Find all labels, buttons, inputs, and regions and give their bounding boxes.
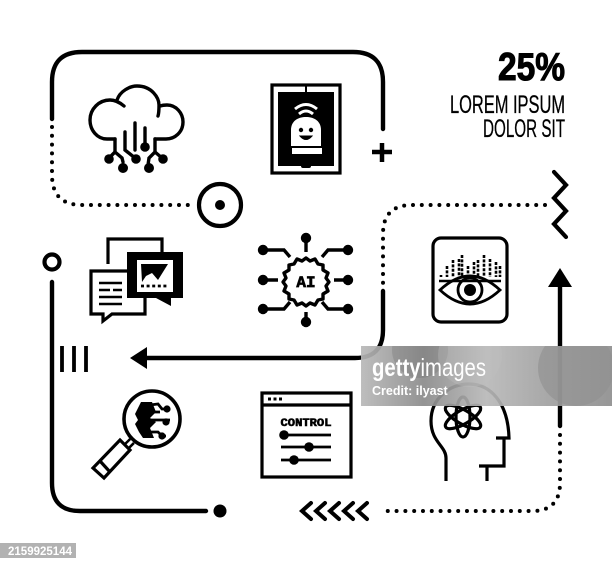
connector: middle line with arrow	[130, 205, 545, 369]
icon: chevrons	[302, 503, 367, 519]
icon: head with atom	[431, 384, 509, 481]
icon: three bars	[62, 346, 86, 372]
connector: right arrow and dotted return	[380, 268, 572, 511]
stat: 25%: 25%	[498, 46, 565, 89]
watermark: credit: Credit: ilyast	[372, 384, 449, 398]
watermark: image id	[0, 543, 76, 558]
icon: control window: CONTROL	[280, 418, 332, 430]
icon: cloud network	[90, 86, 183, 173]
icon: control window	[262, 393, 351, 477]
icon: target circle node	[199, 184, 241, 226]
icon: AI gear network	[258, 233, 353, 327]
watermark: image id: 2159925144	[8, 546, 73, 558]
icon: plus	[372, 143, 392, 162]
connector: left line	[44, 254, 226, 518]
watermark: getty images logo: gettyimages	[372, 354, 486, 382]
watermark band	[361, 346, 612, 406]
icon: tablet robot	[272, 85, 340, 173]
icon: chat bubbles	[91, 239, 183, 321]
icon: zigzag	[554, 172, 566, 237]
icon: AI gear network: AI	[296, 274, 316, 292]
icon: magnifier with gear network	[93, 391, 180, 478]
icon: eye scan	[433, 238, 507, 322]
connector: top loop	[52, 52, 383, 205]
